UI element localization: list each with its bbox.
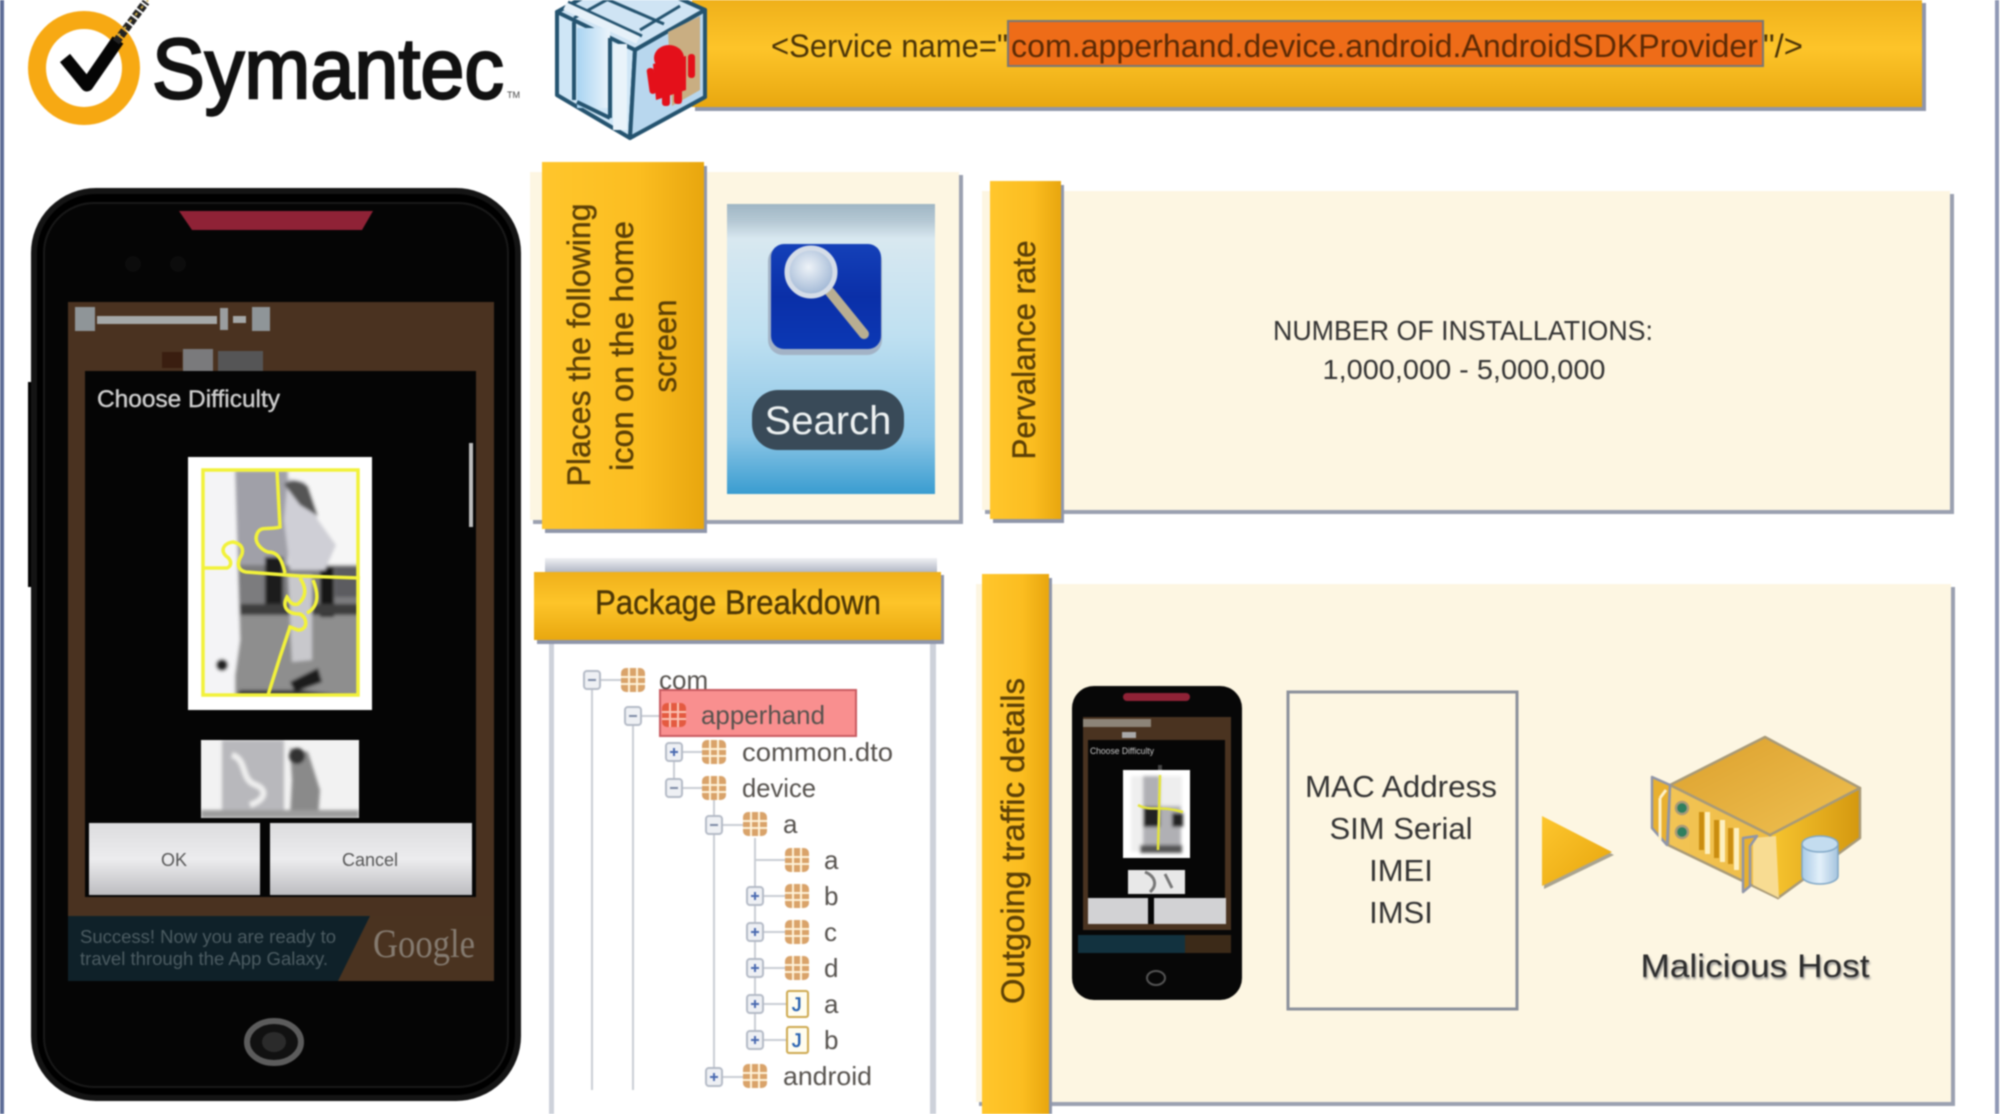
row: apperhand — [625, 700, 825, 730]
icon: check ring — [37, 0, 148, 116]
service text: com.apperhand.device.android.AndroidSDKProvider — [1011, 28, 1758, 64]
tree connectors — [592, 680, 787, 1090]
row: device — [666, 773, 816, 803]
row: class b — [747, 1025, 838, 1055]
heading: Package Breakdown — [595, 584, 881, 622]
installations text: NUMBER OF INSTALLATIONS: — [1273, 315, 1653, 346]
row: a: a — [783, 809, 798, 839]
label — [982, 574, 1052, 1114]
screen — [68, 302, 494, 981]
label: Pervalance rate — [1006, 240, 1042, 460]
label — [542, 162, 707, 533]
row: a.d: d — [824, 953, 838, 983]
row: a.c — [747, 917, 837, 947]
arrow — [1542, 816, 1614, 889]
ad strip — [68, 916, 494, 981]
row: a.d — [747, 953, 838, 983]
ad strip: Google — [373, 921, 475, 966]
row: android — [706, 1061, 872, 1091]
label — [990, 181, 1064, 523]
installations text — [1273, 315, 1653, 385]
heading — [534, 572, 944, 644]
icon: android package box — [557, 0, 705, 138]
label: icon on the home — [604, 221, 640, 471]
row: a.b: b — [824, 881, 838, 911]
label: Places the following — [561, 204, 597, 486]
row: a — [706, 809, 798, 839]
ad strip: travel through the App Galaxy. — [80, 949, 328, 969]
button: OK — [89, 823, 260, 895]
row: android: android — [783, 1061, 872, 1091]
data box — [1288, 692, 1517, 1009]
row: apperhand: apperhand — [701, 700, 825, 730]
slots — [1699, 812, 1739, 870]
row: device: device — [742, 773, 816, 803]
slider — [75, 307, 270, 371]
row: class b: b — [824, 1025, 838, 1055]
service text: "/> — [1763, 28, 1803, 64]
package tree — [584, 665, 893, 1091]
left face — [557, 12, 635, 138]
row: class a: J — [792, 995, 802, 1016]
row: class b: J — [792, 1031, 802, 1052]
row: common.dto — [666, 737, 893, 767]
ad strip: Success! Now you are ready to — [80, 927, 336, 947]
panel: outgoing traffic details — [976, 574, 1955, 1114]
row: class a: a — [824, 989, 839, 1019]
installations text: 1,000,000 - 5,000,000 — [1322, 354, 1606, 385]
data box: IMSI — [1369, 895, 1433, 930]
front end plate — [1753, 836, 1779, 898]
phone: small — [1072, 686, 1242, 1000]
right face — [630, 10, 705, 138]
row: class a — [747, 989, 839, 1019]
highlight: service class — [1008, 21, 1763, 66]
home button — [247, 1021, 301, 1063]
dialog — [85, 371, 476, 897]
top banner — [692, 0, 1926, 111]
button: Cancel — [270, 823, 472, 895]
highlight: apperhand — [660, 690, 856, 736]
panel: package breakdown — [534, 558, 944, 1114]
row: a.a: a — [824, 845, 839, 875]
data box: MAC Address — [1305, 769, 1497, 804]
logo: Symantec: TM — [507, 90, 520, 100]
panel: prevalence rate — [982, 181, 1954, 523]
row: a.c: c — [824, 917, 837, 947]
host label: Malicious Host — [1640, 948, 1870, 984]
search pill — [752, 390, 904, 450]
data box: IMEI — [1369, 853, 1433, 888]
search tile — [727, 204, 935, 494]
top face — [557, 0, 705, 50]
row: a.a — [785, 845, 839, 875]
service text: <Service name=" — [771, 28, 1008, 64]
speaker — [179, 211, 373, 230]
icon: magnifier — [768, 244, 882, 355]
wordmark: Symantec — [152, 22, 504, 117]
dialog title: Choose Difficulty — [97, 386, 280, 413]
row: com — [584, 665, 708, 695]
search pill: Search — [765, 399, 891, 443]
phone: small: Choose Difficulty — [1090, 746, 1154, 756]
logo: Symantec — [37, 0, 520, 117]
label: screen — [647, 300, 683, 392]
row: a.b — [747, 881, 838, 911]
button: Cancel: Cancel — [342, 850, 398, 870]
puzzle photo — [188, 457, 372, 710]
icon: malicious server — [1652, 737, 1860, 898]
android robot — [646, 45, 695, 106]
data box: SIM Serial — [1330, 811, 1472, 846]
label: Outgoing traffic details — [995, 678, 1031, 1004]
rack ears — [1652, 777, 1670, 845]
status lights — [1676, 802, 1688, 814]
panel: home screen icon — [530, 162, 963, 533]
button: OK: OK — [161, 850, 187, 870]
row: com: com — [659, 665, 708, 695]
thumbnail — [201, 740, 359, 818]
cylinder — [1802, 836, 1838, 884]
phone: large — [28, 191, 518, 1098]
row: common.dto: common.dto — [742, 737, 893, 767]
